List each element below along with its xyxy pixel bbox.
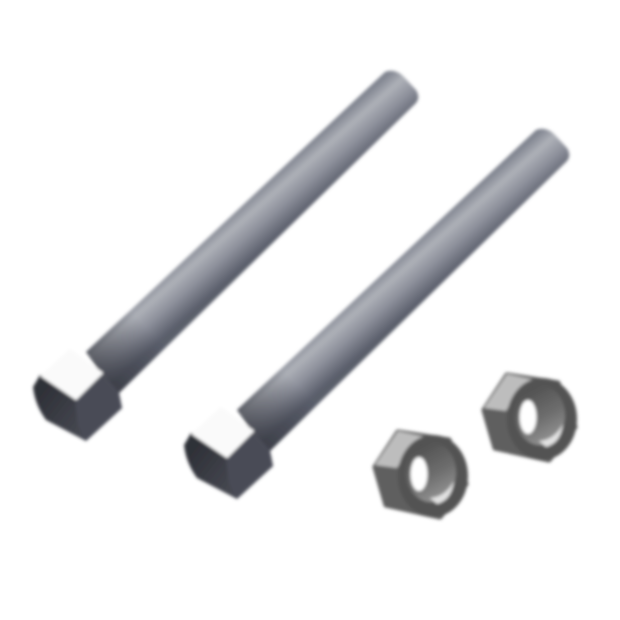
nut right bore xyxy=(515,385,565,445)
nut right top face xyxy=(484,374,535,411)
nut left body xyxy=(375,432,466,517)
nut left hole xyxy=(410,457,428,491)
bolt 1 head xyxy=(33,350,122,441)
nut left highlight xyxy=(430,481,454,504)
nut right hole xyxy=(520,400,536,434)
nut left front ring xyxy=(398,435,468,517)
nut left bore xyxy=(406,442,456,502)
bolt 2 shaft xyxy=(237,129,569,451)
nut right xyxy=(484,374,577,460)
nut right body xyxy=(484,375,575,460)
nut left xyxy=(375,431,468,517)
bolt 1 xyxy=(33,71,418,441)
nut right front ring xyxy=(507,378,577,460)
nut right highlight xyxy=(539,424,563,447)
nut left top face xyxy=(375,431,426,468)
bolt 1 shaft xyxy=(86,71,418,393)
bolt 2 xyxy=(184,129,569,499)
bolt 2 head xyxy=(184,408,273,499)
